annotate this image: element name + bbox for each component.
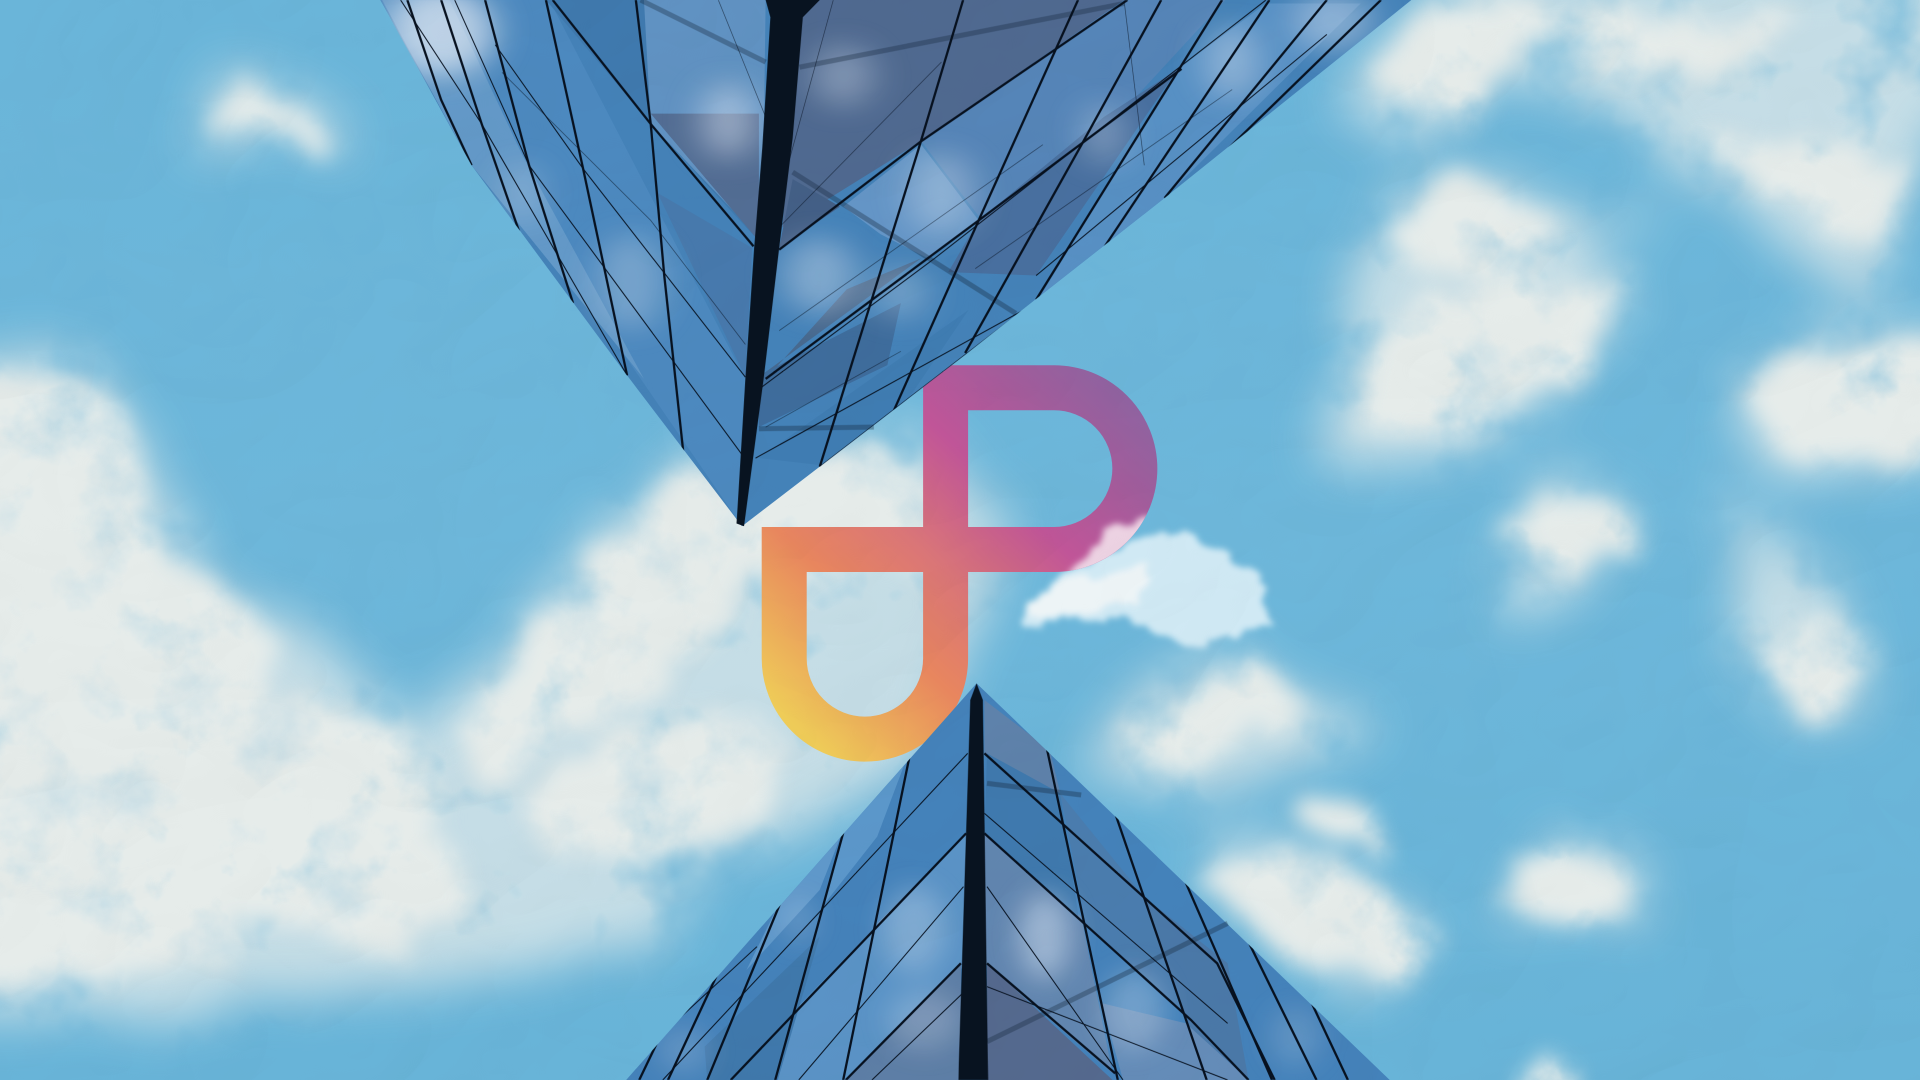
- tower glass panes: [360, 0, 1442, 534]
- tower: central corner column: [737, 0, 820, 526]
- tower: sky reflections: [387, 0, 1374, 331]
- lower tower: central corner column: [958, 683, 988, 1080]
- tower: faint reflected beams: [641, 0, 1124, 429]
- lower tower: faint reflected beams: [987, 783, 1228, 1042]
- tower: mullions: [401, 0, 1381, 467]
- logo: gradient UP monogram: [784, 388, 1135, 739]
- lower tower: mullions: [639, 750, 1348, 1080]
- lower tower: sky reflections: [658, 887, 1322, 1073]
- building: upper glass tower: [360, 0, 1442, 534]
- lower tower glass panes: [600, 670, 1420, 1080]
- building: lower glass tower: [600, 670, 1420, 1080]
- cloud: bright cloud beside the logo: [1022, 533, 1269, 647]
- cloud: wisp showing through the logo: [1066, 512, 1148, 571]
